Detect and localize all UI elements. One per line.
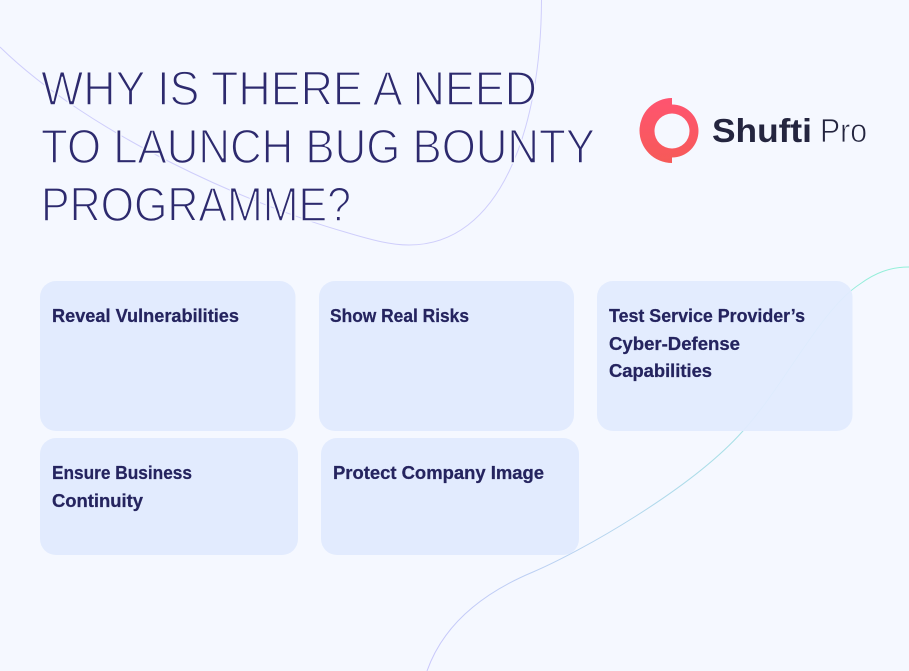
panel: Protect Company Image bbox=[321, 438, 579, 555]
panel: Test Service Provider's Cyber-Defense Capabilities: Test Service Provider’s bbox=[609, 306, 805, 326]
title: WHY IS THERE A NEED bbox=[41, 63, 537, 116]
title: TO LAUNCH BUG BOUNTY bbox=[41, 121, 595, 174]
panel: Test Service Provider's Cyber-Defense Capabilities: Cyber-Defense bbox=[609, 334, 740, 354]
panel: Test Service Provider's Cyber-Defense Capabilities: Capabilities bbox=[609, 361, 712, 381]
logo wordmark: Shufti bbox=[712, 112, 812, 149]
panel: Ensure Business Continuity bbox=[40, 438, 298, 555]
panel: Reveal Vulnerabilities: Reveal Vulnerabilities bbox=[52, 306, 239, 326]
panel: Ensure Business Continuity: Continuity bbox=[52, 491, 143, 511]
title: PROGRAMME? bbox=[41, 179, 351, 232]
panel: Reveal Vulnerabilities bbox=[40, 281, 296, 431]
panel: Show Real Risks: Show Real Risks bbox=[330, 306, 469, 326]
panel: Ensure Business Continuity: Ensure Business bbox=[52, 463, 192, 483]
logo wordmark: Pro bbox=[820, 112, 867, 149]
logo wordmark bbox=[712, 112, 867, 149]
icon: logo ring bbox=[640, 98, 698, 163]
title bbox=[41, 63, 595, 232]
logo: Shufti Pro bbox=[640, 98, 867, 163]
panel: Test Service Provider's Cyber-Defense Capabilities bbox=[597, 281, 852, 431]
panel: Show Real Risks bbox=[319, 281, 574, 431]
panel: Protect Company Image: Protect Company Image bbox=[333, 463, 544, 483]
